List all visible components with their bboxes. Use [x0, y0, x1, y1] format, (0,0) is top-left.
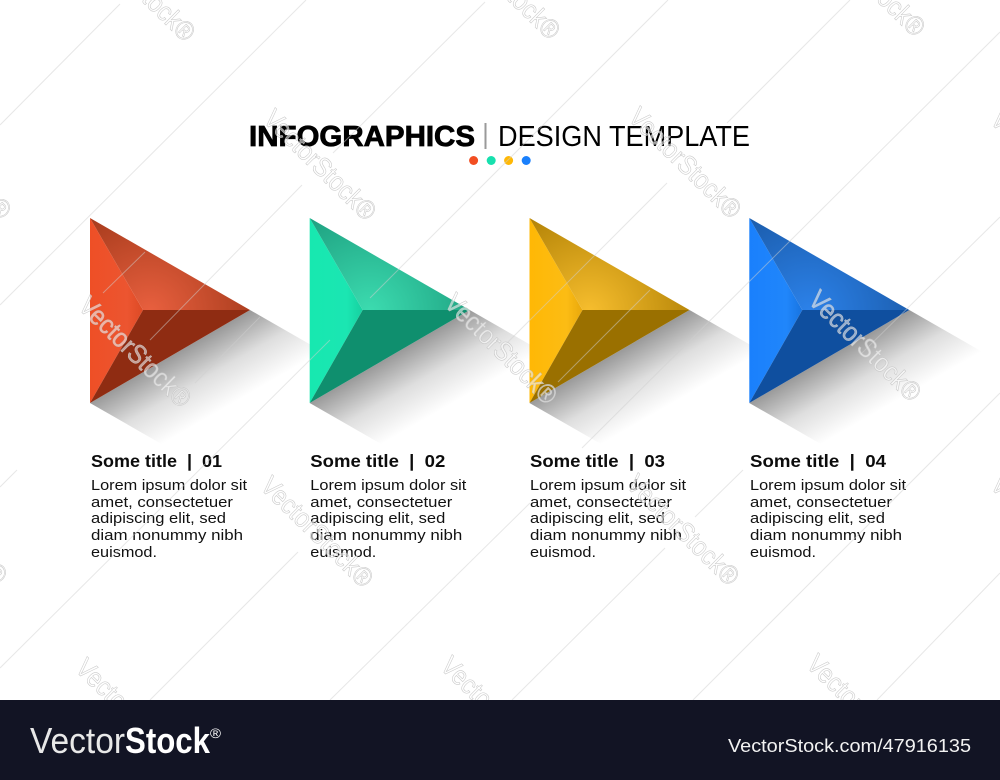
- text block: step 2: Lorem ipsum dolor sit: [310, 478, 466, 494]
- text block: step 1: diam nonummy nibh: [91, 528, 243, 544]
- text block: step 3: euismod.: [530, 545, 596, 561]
- watermarks: VectorStock®: [623, 101, 747, 225]
- footer image id: VectorStock.com/47916135: [728, 735, 971, 756]
- text block: step 1: euismod.: [91, 545, 157, 561]
- footer logo: Stock: [125, 720, 211, 761]
- shadow: step 1: [90, 310, 325, 446]
- text block: step 3: Lorem ipsum dolor sit: [530, 478, 686, 494]
- watermarks: VectorStock®: [621, 468, 745, 592]
- shadow: step 2: [310, 310, 545, 446]
- title: INFOGRAPHICS: [249, 121, 475, 153]
- footer logo: Vector: [30, 720, 125, 761]
- title: DESIGN TEMPLATE: [498, 121, 750, 153]
- shadow: step 3: [530, 310, 764, 446]
- watermarks: VectorStock®: [439, 287, 563, 411]
- watermarks: VectorStock®: [73, 290, 197, 414]
- text block: step 3: Some title | 03: [530, 451, 665, 471]
- text block: step 1: Some title | 01: [91, 451, 222, 471]
- text block: step 2: adipiscing elit, sed: [310, 511, 445, 527]
- text block: step 4: euismod.: [750, 545, 816, 561]
- text block: step 2: euismod.: [310, 545, 376, 561]
- footer logo: ®: [210, 725, 222, 741]
- icon: green 3D triangle: [310, 218, 470, 403]
- icon: blue 3D triangle: [749, 218, 909, 403]
- text block: step 4: [750, 451, 906, 561]
- watermarks: VectorStock®: [255, 470, 379, 594]
- watermarks: VectorStock®: [258, 103, 382, 227]
- text block: step 2: [310, 451, 466, 561]
- title: [249, 121, 750, 153]
- text block: step 2: Some title | 02: [310, 451, 446, 471]
- text block: step 3: adipiscing elit, sed: [530, 511, 665, 527]
- text block: step 3: [530, 451, 686, 561]
- footer logo: [30, 720, 222, 761]
- text block: step 4: amet, consectetuer: [750, 495, 892, 511]
- icon: yellow 3D triangle: [530, 218, 690, 403]
- text block: step 4: Some title | 04: [750, 451, 886, 471]
- text block: step 1: amet, consectetuer: [91, 495, 233, 511]
- text block: step 4: Lorem ipsum dolor sit: [750, 478, 906, 494]
- text block: step 1: [91, 451, 247, 561]
- shadow: step 4: [749, 310, 984, 446]
- text block: step 3: amet, consectetuer: [530, 495, 672, 511]
- text block: step 2: amet, consectetuer: [310, 495, 452, 511]
- text block: step 2: diam nonummy nibh: [310, 528, 462, 544]
- text block: step 4: diam nonummy nibh: [750, 528, 902, 544]
- text block: step 1: Lorem ipsum dolor sit: [91, 478, 247, 494]
- text block: step 1: adipiscing elit, sed: [91, 511, 226, 527]
- footer band: [0, 700, 1000, 780]
- text block: step 4: adipiscing elit, sed: [750, 511, 885, 527]
- icon: red 3D triangle: [90, 218, 250, 403]
- colour dots: [469, 156, 531, 165]
- text block: step 3: diam nonummy nibh: [530, 528, 682, 544]
- watermarks: VectorStock®: [803, 284, 927, 408]
